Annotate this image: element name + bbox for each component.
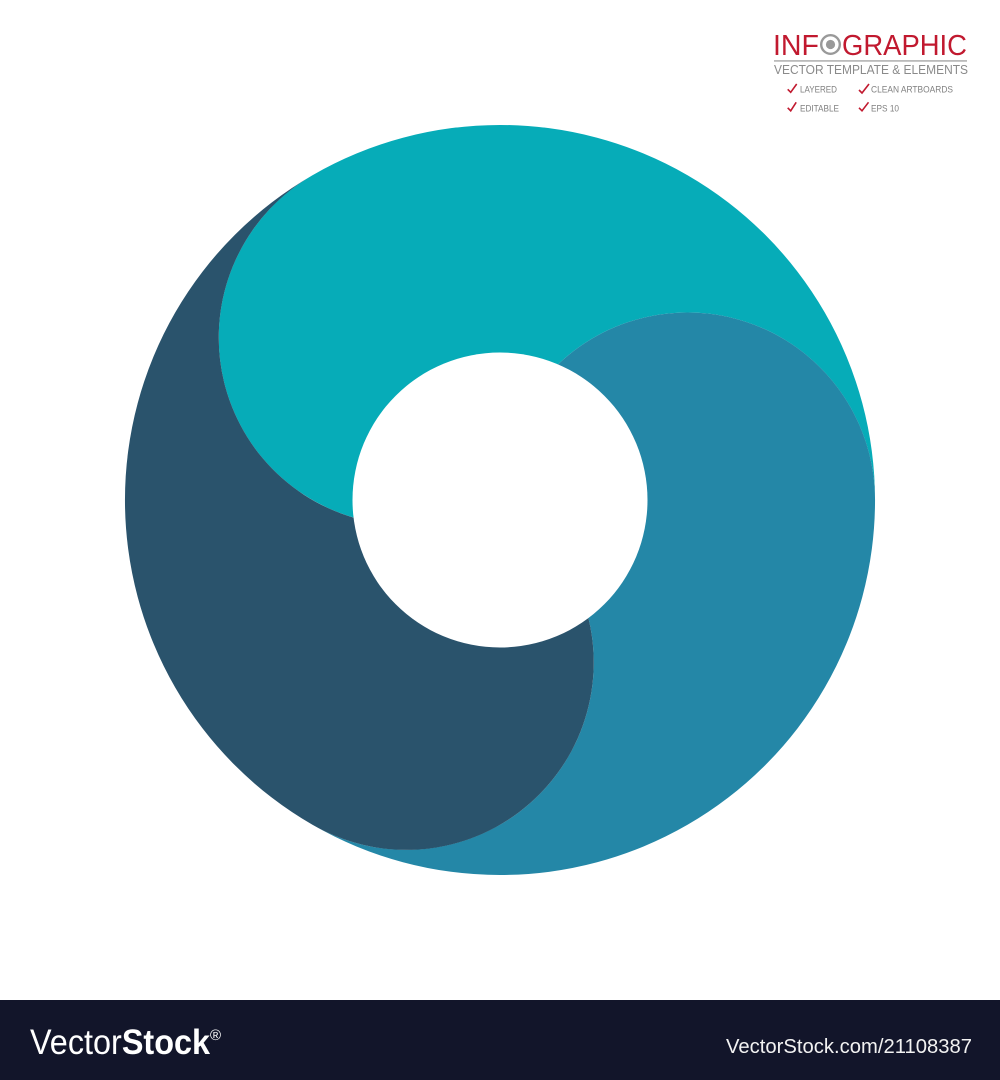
- logo subtitle: VECTOR TEMPLATE & ELEMENTS: [774, 62, 968, 77]
- check item: eps 10: [859, 102, 899, 114]
- swirl ring chart: [0, 125, 965, 1012]
- segment: dark blue: [0, 166, 656, 931]
- segment: medium blue: [297, 248, 965, 1012]
- registered mark: ®: [210, 1027, 221, 1044]
- logo icon: target O: [821, 35, 840, 54]
- logo title: [773, 30, 967, 62]
- check item: editable: [788, 102, 839, 114]
- segment: teal: [219, 125, 875, 518]
- check item: eps 10: EPS 10: [871, 104, 899, 114]
- logo title: INF: [773, 30, 819, 62]
- logo block: infographic template: [773, 30, 968, 114]
- center hole: [352, 352, 648, 648]
- check item: clean artboards: CLEAN ARTBOARDS: [871, 85, 953, 95]
- footer logo: VectorStock: [30, 1023, 210, 1062]
- logo title: GRAPHIC: [842, 30, 967, 62]
- check item: layered: [788, 84, 837, 95]
- check item: editable: EDITABLE: [800, 104, 839, 114]
- footer bar: [0, 1000, 1000, 1080]
- footer url: VectorStock.com/21108387: [726, 1036, 972, 1058]
- check item: layered: LAYERED: [800, 85, 837, 95]
